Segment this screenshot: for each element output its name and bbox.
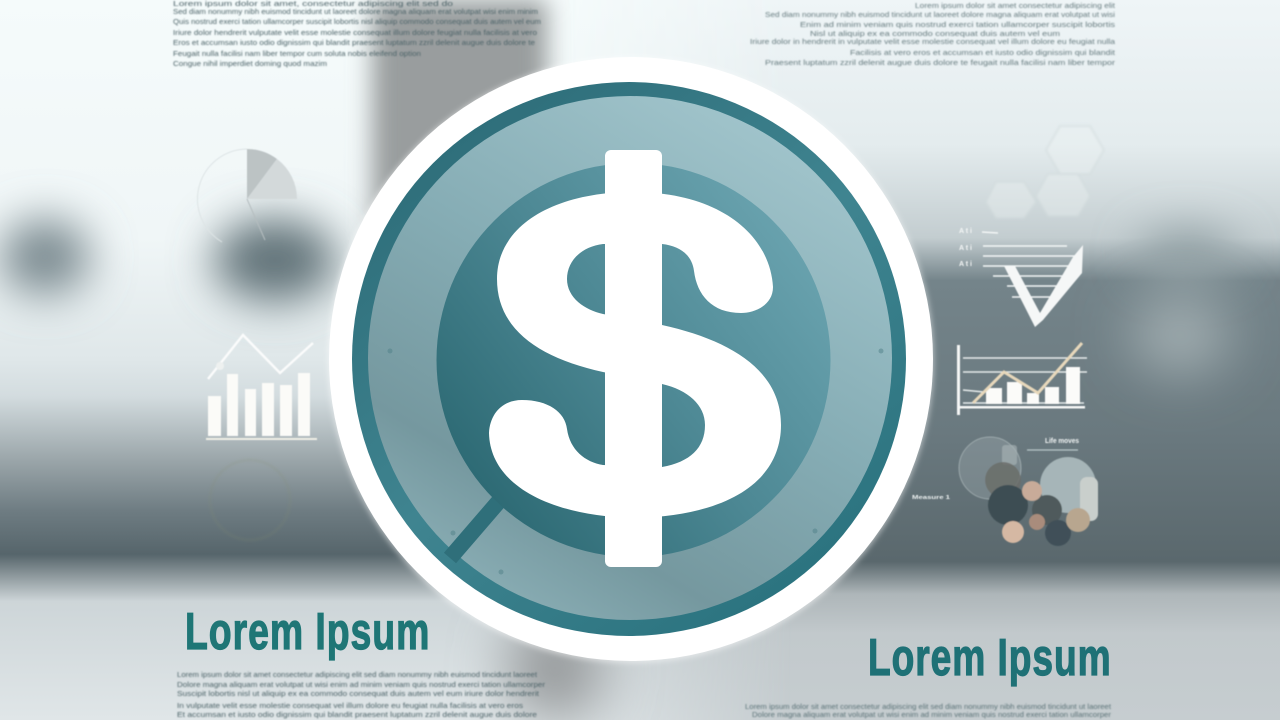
text block: top left: Feugait nulla facilisi nam liber tempor cum soluta nobis eleifend option [173, 49, 421, 58]
dollar sign [489, 150, 781, 567]
text block: top left [173, 0, 541, 68]
text block: top right: Enim ad minim veniam quis nostrud exerci tation ullamcorper suscipit lobortis [800, 20, 1116, 29]
text block: top left: Sed diam nonummy nibh euismod tincidunt ut laoreet dolore magna aliquam erat volutpat wisi enim minim [173, 7, 538, 16]
text block: top right [750, 1, 1116, 67]
text block: top left: Eros et accumsan iusto odio dignissim qui blandit praesent luptatum zzril delenit augue duis dolore te [173, 38, 535, 47]
icon: bubble chart: Life moves [1045, 438, 1079, 445]
icon: faint circle chart [210, 460, 290, 540]
text block: bottom right [745, 702, 1112, 719]
text block: bottom left: Et accumsan et iusto odio dignissim qui blandit praesent luptatum zzril delenit augue duis dolore [177, 710, 537, 719]
light inner ring [368, 96, 892, 620]
icon: hexagons [986, 126, 1104, 218]
text block: bottom left: In vulputate velit esse molestie consequat vel illum dolore eu feugiat nulla facilisis at vero eros [177, 701, 523, 710]
text block: top right: Facilisis at vero eros et accumsan et iusto odio dignissim qui blandit [850, 48, 1115, 57]
icon: combined bar and line chart [957, 343, 1087, 415]
icon: funnel V chart [959, 228, 1083, 327]
text block: top right: Nisl ut aliquip ex ea commodo consequat duis autem vel eum [810, 29, 1060, 38]
icon: funnel V chart: A t i [959, 245, 972, 252]
text block: top left: Congue nihil imperdiet doming quod mazim [173, 59, 327, 68]
icon: bubble chart [912, 437, 1098, 546]
white badge disc [329, 57, 933, 661]
text block: bottom left: Lorem ipsum dolor sit amet consectetur adipiscing elit sed diam nonummy nibh euismod tincidunt laoreet [177, 670, 537, 679]
icon: funnel V chart: A t i [959, 228, 972, 235]
text block: top right: Iriure dolor in hendrerit in vulputate velit esse molestie consequat vel illum dolore eu feugiat nulla [750, 37, 1115, 46]
icon: bar chart with trend line [206, 335, 317, 440]
text block: top left: Iriure dolor hendrerit vulputate velit esse molestie consequat illum dolore feugiat nulla facilisis at vero [173, 28, 537, 37]
text block: bottom left: Suscipit lobortis nisl ut aliquip ex ea commodo consequat duis autem vel eum iriure dolor hendrerit [177, 689, 539, 698]
icon: funnel V chart: A t i [959, 261, 972, 268]
text block: bottom left: Dolore magna aliquam erat volutpat ut wisi enim ad minim veniam quis nostrud exerci tation ullamcorper [177, 680, 546, 689]
ring rivets [388, 348, 884, 574]
text block: top right: Sed diam nonummy nibh euismod tincidunt ut laoreet dolore magna aliquam erat volutpat ut wisi [765, 10, 1115, 19]
icon: pie chart [198, 149, 297, 242]
central dollar badge [328, 57, 934, 663]
magnifier handle [450, 500, 500, 558]
text block: top right: Lorem ipsum dolor sit amet consectetur adipiscing elit [915, 1, 1115, 10]
text block: bottom right: Lorem ipsum dolor sit amet consectetur adipiscing elit sed diam nonummy nibh euismod tincidunt ut laoreet [745, 702, 1111, 711]
teal outer ring [352, 82, 906, 636]
text block: top left: Quis nostrud exerci tation ullamcorper suscipit lobortis nisl aliquip commodo consequat duis autem vel eum [173, 17, 541, 26]
text block: bottom left [177, 670, 546, 719]
heading: right Lorem Ipsum: Lorem Ipsum [868, 628, 1112, 687]
icon: bubble chart: Measure 1 [912, 495, 950, 501]
text block: top right: Praesent luptatum zzril delenit augue duis dolore te feugait nulla facilisi nam liber tempor [765, 58, 1116, 67]
inner teal disc [436, 163, 830, 557]
heading: left Lorem Ipsum: Lorem Ipsum [185, 602, 430, 660]
text block: bottom right: Dolore magna aliquam erat volutpat ut wisi enim ad minim veniam quis nostrud exerci tation ullamcorper [752, 710, 1112, 719]
